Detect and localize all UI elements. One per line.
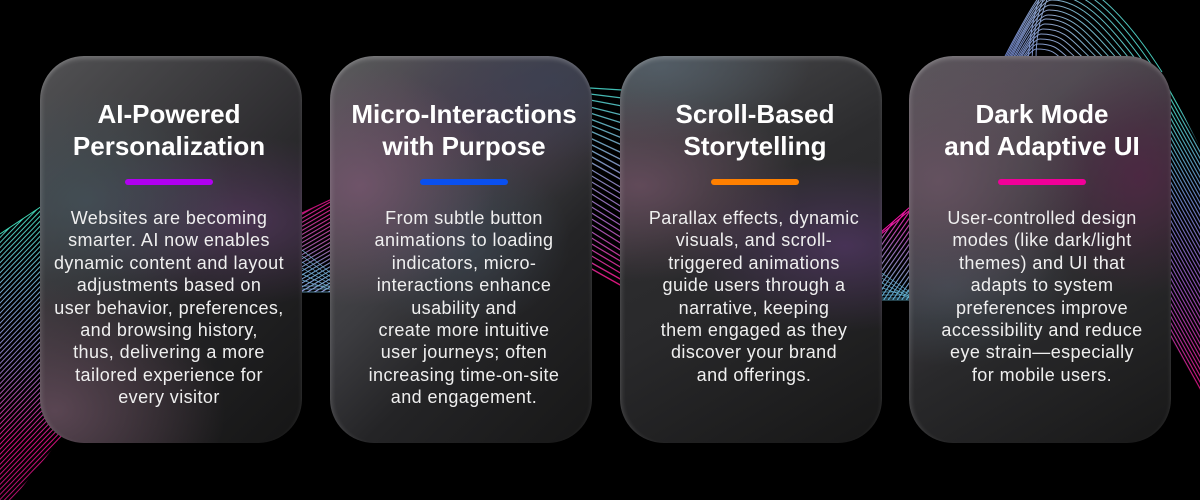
heading: Dark Mode and Adaptive UI (944, 99, 1140, 161)
body text: scroll storytelling: and offerings. (697, 365, 811, 385)
heading: Scroll-Based Storytelling: Storytelling (683, 131, 826, 161)
body text: scroll storytelling: visuals, and scroll- (676, 230, 832, 250)
body text: micro-interactions: indicators, micro- (392, 253, 536, 273)
wave: left band (0, 206, 62, 500)
body text: micro-interactions: increasing time-on-site (369, 365, 559, 385)
wave: between cards two and three (590, 88, 622, 286)
body text: personalization: and browsing history, (80, 320, 258, 340)
heading: AI-Powered Personalization: Personalization (73, 131, 265, 161)
accent bar: purple (125, 179, 213, 185)
body text: scroll storytelling: guide users through a (663, 275, 845, 295)
body text: dark mode: preferences improve (956, 298, 1128, 318)
body text: dark mode: eye strain—especially (950, 342, 1134, 362)
heading: AI-Powered Personalization (73, 99, 265, 161)
body text: personalization: adjustments based on (77, 275, 261, 295)
wave: right edge band (1160, 70, 1200, 395)
heading: Scroll-Based Storytelling: Scroll-Based (676, 99, 834, 129)
wave: peak above card four (1003, 0, 1162, 72)
body text: micro-interactions: usability and (411, 298, 517, 318)
body text: dark mode: themes) and UI that (959, 253, 1125, 273)
heading: Scroll-Based Storytelling (676, 99, 834, 161)
heading: Dark Mode and Adaptive UI: Dark Mode (976, 99, 1108, 129)
body text: dark mode: modes (like dark/light (952, 230, 1132, 250)
panel: Scroll-Based Storytelling (620, 56, 882, 443)
body text: micro-interactions: user journeys; often (381, 342, 547, 362)
accent bar: blue (420, 179, 508, 185)
body text: personalization: every visitor (118, 387, 220, 407)
body text: micro-interactions: From subtle button (385, 208, 543, 228)
body text: personalization: thus, delivering a more (73, 342, 265, 362)
body text: scroll storytelling: narrative, keeping (679, 298, 829, 318)
accent bar: orange (711, 179, 799, 185)
heading: Micro-Interactions with Purpose: with Purpose (382, 131, 546, 161)
body text: scroll storytelling: triggered animations (668, 253, 840, 273)
body text: micro-interactions: create more intuitive (379, 320, 549, 340)
panel: Dark Mode and Adaptive UI (909, 56, 1171, 443)
wave: between cards one and two (302, 199, 330, 292)
body text: scroll storytelling (649, 208, 859, 385)
body text: dark mode: for mobile users. (972, 365, 1112, 385)
body text: micro-interactions: animations to loading (375, 230, 553, 250)
body text: scroll storytelling: discover your brand (671, 342, 837, 362)
body text: micro-interactions (369, 208, 559, 407)
panel: AI-Powered Personalization (40, 56, 302, 443)
body text: personalization: smarter. AI now enables (68, 230, 270, 250)
body text: micro-interactions: interactions enhance (377, 275, 551, 295)
body text: personalization: tailored experience for (75, 365, 263, 385)
body text: dark mode: accessibility and reduce (941, 320, 1143, 340)
wave: between cards three and four (882, 207, 909, 300)
body text: personalization: user behavior, preferences, (54, 298, 284, 318)
accent bar: magenta (998, 179, 1086, 185)
heading: Dark Mode and Adaptive UI: and Adaptive UI (944, 131, 1140, 161)
body text: dark mode (941, 208, 1143, 385)
body text: scroll storytelling: Parallax effects, dynamic (649, 208, 859, 228)
heading: Micro-Interactions with Purpose: Micro-Interactions (351, 99, 577, 129)
body text: personalization: dynamic content and layout (54, 253, 284, 273)
body text: dark mode: User-controlled design (947, 208, 1137, 228)
panel: Micro-Interactions with Purpose (330, 56, 592, 443)
heading: Micro-Interactions with Purpose (351, 99, 577, 161)
body text: scroll storytelling: them engaged as they (661, 320, 847, 340)
body text: dark mode: adapts to system (971, 275, 1113, 295)
heading: AI-Powered Personalization: AI-Powered (97, 99, 241, 129)
body text: micro-interactions: and engagement. (391, 387, 537, 407)
body text: personalization (54, 208, 284, 407)
body text: personalization: Websites are becoming (71, 208, 267, 228)
